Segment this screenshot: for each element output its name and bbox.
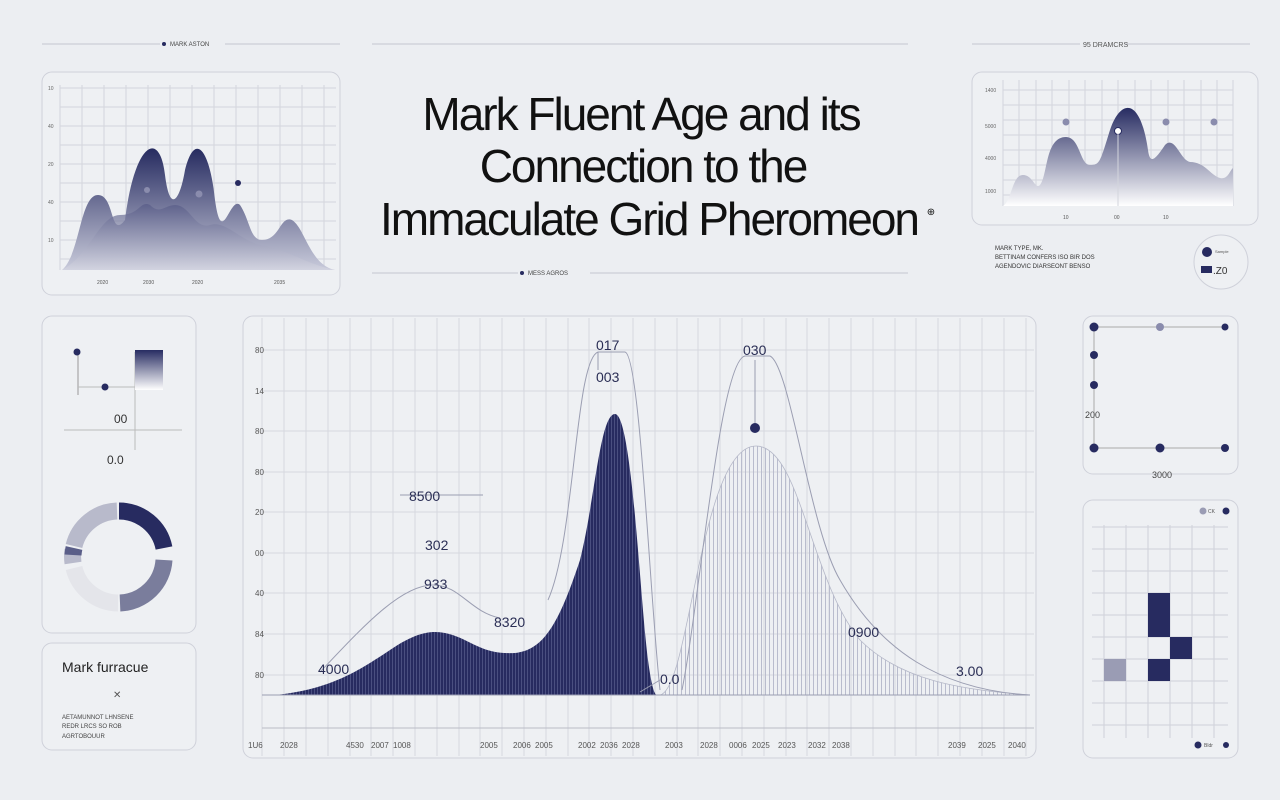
dark area [275, 414, 657, 695]
value labels: 0.0 [660, 671, 680, 687]
text block: right notes: MARK TYPE, MK. [995, 246, 1044, 252]
hatched light area [660, 446, 1030, 695]
panel: top-left area chart: 40 [48, 124, 54, 130]
y axis labels: 80 [255, 427, 264, 436]
x axis labels: 2028 [700, 741, 718, 750]
y axis labels: 40 [255, 589, 264, 598]
panel: top-left area chart: 10 [48, 238, 54, 244]
panel: top-left area chart: 2035 [274, 280, 285, 286]
panel: top-left area chart: 2030 [143, 280, 154, 286]
title: Connection to the [480, 140, 807, 192]
x axis labels: 2028 [280, 741, 298, 750]
x axis labels: 2003 [665, 741, 683, 750]
text block: right notes: BETTINAM CONFERS ISO BIR DOS [995, 255, 1095, 261]
x axis labels: 2036 [600, 741, 618, 750]
value labels [318, 337, 983, 687]
x axis labels: 2028 [622, 741, 640, 750]
panel: top-left area chart: 10 [48, 86, 54, 92]
icon: badge circle: .Z0 [1213, 266, 1228, 277]
panel: bottom-left legend text [42, 643, 196, 750]
panel: top-right area chart: 10 [1063, 215, 1069, 221]
x axis labels: 0006 [729, 741, 747, 750]
panel: top-left area chart: 2020 [192, 280, 203, 286]
x axis labels: 2039 [948, 741, 966, 750]
panel: bottom-left legend text: AGRTOBOUUR [62, 734, 105, 740]
x axis labels: 1008 [393, 741, 411, 750]
value labels: 030 [743, 342, 767, 358]
subtitle label: MESS AGROS [528, 271, 568, 277]
panel: left mini charts [42, 316, 196, 633]
title: ⊕ [927, 207, 935, 218]
value labels: 8320 [494, 614, 525, 630]
x axis labels: 2005 [480, 741, 498, 750]
title: Immaculate Grid Pheromeon [380, 193, 918, 245]
x axis labels: 2002 [578, 741, 596, 750]
panel: top-right area chart [972, 72, 1258, 225]
value labels: 8500 [409, 488, 440, 504]
panel: right grid heatmap: CK [1208, 509, 1216, 515]
value labels: 4000 [318, 661, 349, 677]
panel: right dots: 200 [1085, 410, 1100, 420]
panel: top-left area chart: 2020 [97, 280, 108, 286]
icon: badge circle [1194, 235, 1248, 289]
x axis labels [248, 741, 1026, 750]
y axis labels: 14 [255, 387, 264, 396]
panel: right grid heatmap: Bldr [1204, 743, 1213, 749]
y axis labels: 84 [255, 630, 264, 639]
panel: top-right area chart: 5000 [985, 124, 996, 130]
panel: bottom-left legend text: REDR LRCS SO ROB [62, 724, 122, 730]
text block: right notes: AGENDOVIC DIARSEONT BENSO [995, 264, 1091, 270]
x axis labels: 1U6 [248, 741, 263, 750]
value labels: 3.00 [956, 663, 983, 679]
y axis labels: 80 [255, 346, 264, 355]
donut chart [73, 511, 164, 603]
x axis labels: 2032 [808, 741, 826, 750]
x axis labels: 2025 [978, 741, 996, 750]
y axis labels [255, 346, 264, 680]
text block: right notes [995, 246, 1095, 270]
x axis labels: 2025 [752, 741, 770, 750]
panel: top-left area chart: 40 [48, 200, 54, 206]
panel: top-left area chart: 20 [48, 162, 54, 168]
outline curves [320, 352, 1030, 695]
header label left: MARK ASTON [170, 42, 209, 48]
x axis labels: 2023 [778, 741, 796, 750]
x axis labels: 2007 [371, 741, 389, 750]
panel: bottom-left legend text: AETAMUNNOT LHNSENE [62, 715, 133, 721]
panel: right dots: 3000 [1152, 470, 1172, 480]
value labels: 933 [424, 576, 448, 592]
panel: bottom-left legend text: ✕ [113, 690, 121, 701]
value labels: 0900 [848, 624, 879, 640]
x axis labels: 2006 [513, 741, 531, 750]
value labels: 003 [596, 369, 620, 385]
y axis labels: 80 [255, 468, 264, 477]
panel: left mini charts: 00 [114, 412, 128, 426]
title [380, 88, 935, 245]
y axis labels: 20 [255, 508, 264, 517]
panel: left mini charts: 0.0 [107, 453, 124, 467]
panel: top-right area chart: 00 [1114, 215, 1120, 221]
x axis labels: 2040 [1008, 741, 1026, 750]
header rules [42, 44, 1250, 273]
panel: top-left area chart [42, 72, 340, 295]
panel: top-right area chart: 1000 [985, 189, 996, 195]
x axis labels: 2005 [535, 741, 553, 750]
icon: badge circle: Sample [1215, 249, 1229, 254]
x axis labels: 4530 [346, 741, 364, 750]
panel: top-right area chart: 10 [1163, 215, 1169, 221]
panel: top-right area chart: 1400 [985, 88, 996, 94]
y axis labels: 00 [255, 549, 264, 558]
title: Mark Fluent Age and its [422, 88, 861, 140]
y axis labels: 80 [255, 671, 264, 680]
value labels: 017 [596, 337, 620, 353]
header label right: 95 DRAMCRS [1083, 42, 1128, 49]
x axis labels: 2038 [832, 741, 850, 750]
panel: top-right area chart: 4000 [985, 156, 996, 162]
panel: right dots [1083, 316, 1238, 480]
panel: bottom-left legend text: Mark furracue [62, 659, 149, 675]
value labels: 302 [425, 537, 449, 553]
panel: right grid heatmap [1083, 500, 1238, 758]
panel: main chart [243, 316, 1036, 758]
